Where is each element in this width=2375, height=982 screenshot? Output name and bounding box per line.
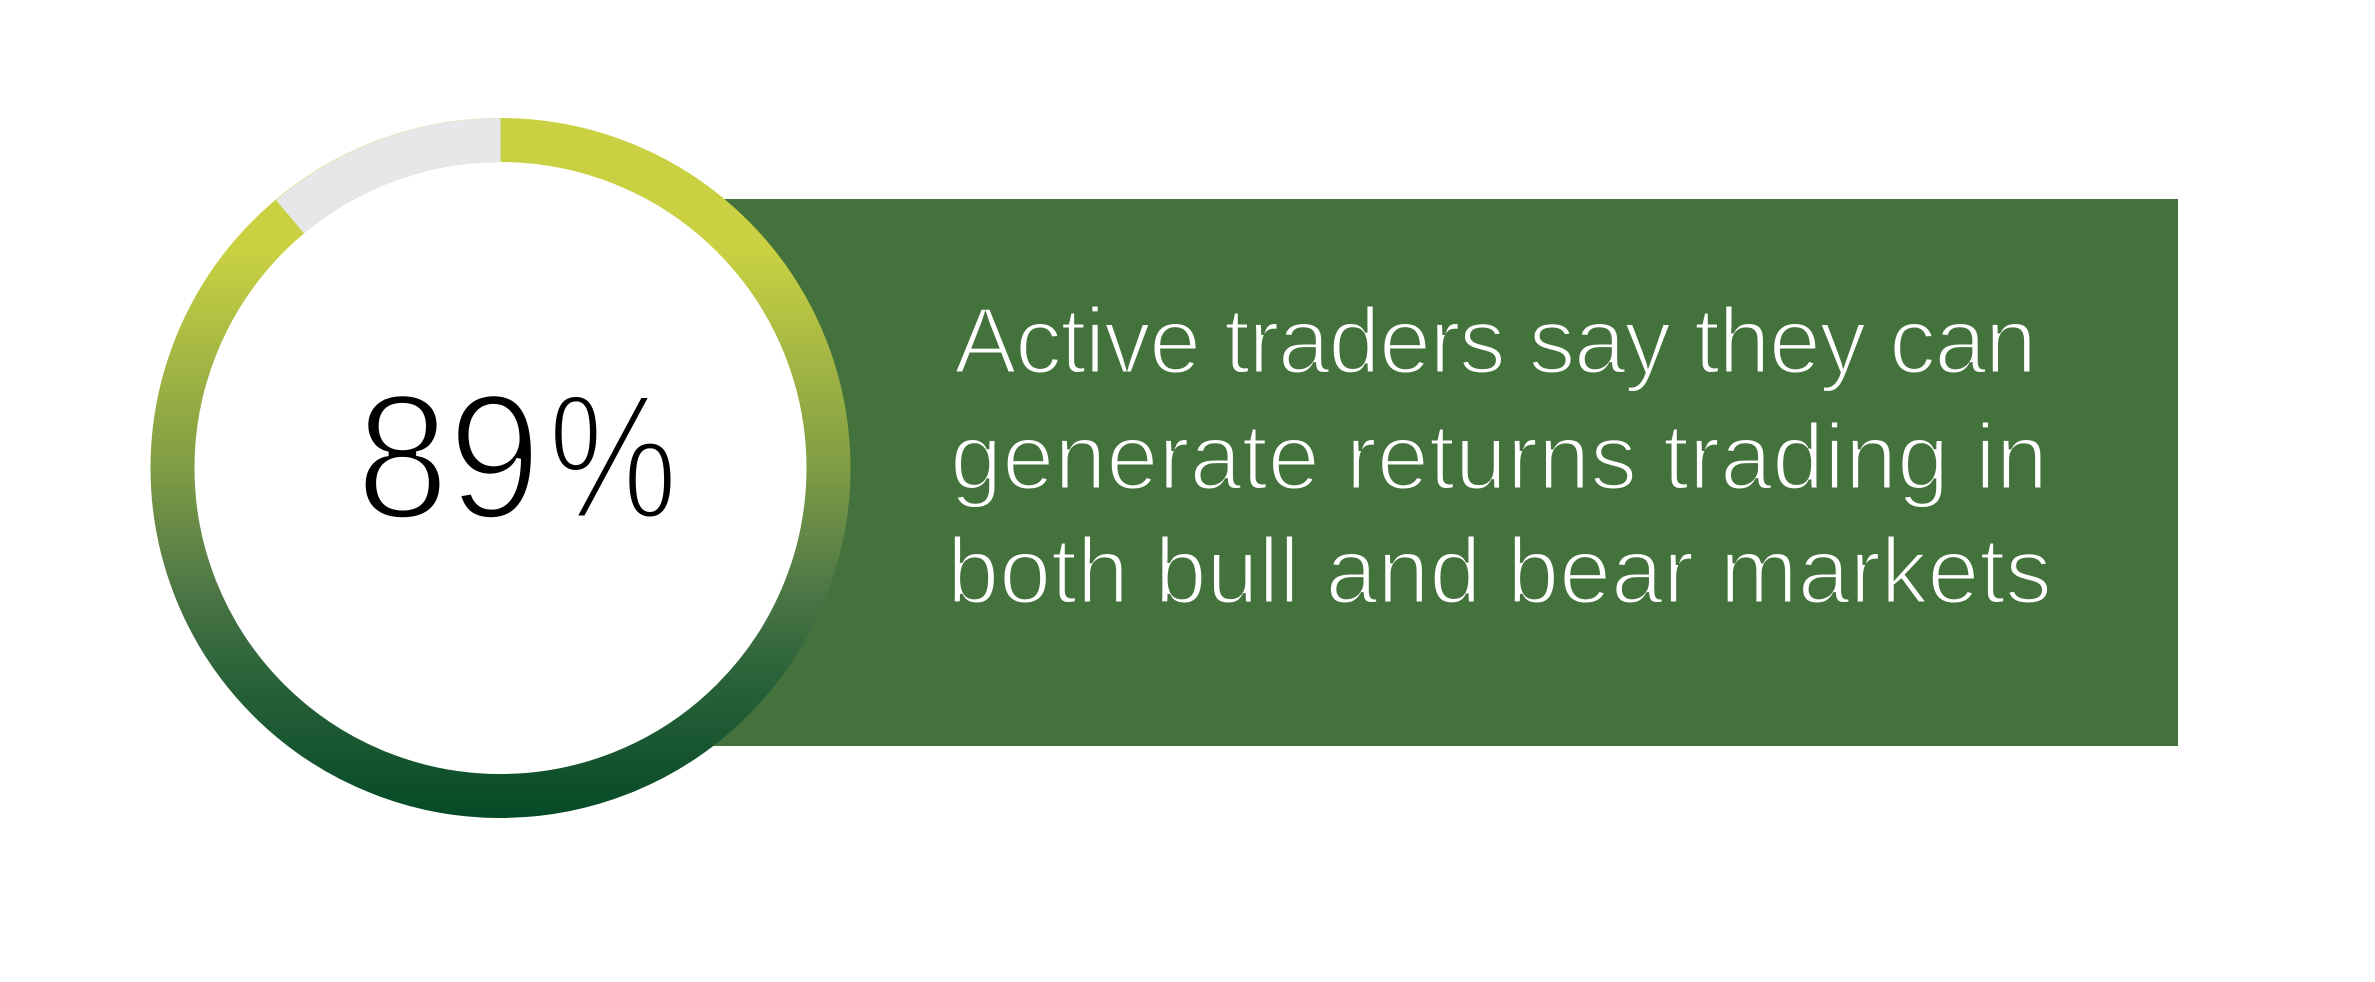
ring: remaining 11% grey segment <box>276 118 500 234</box>
percentage value: 89 <box>356 357 541 556</box>
percentage value <box>356 357 678 556</box>
white centre disc <box>180 148 820 788</box>
statement text: Active traders say they can <box>954 288 2037 393</box>
statement text <box>947 288 2052 623</box>
donut chart: 89% <box>172 118 828 796</box>
percentage value: % <box>548 358 678 556</box>
ring: 89% gradient segment <box>172 140 828 796</box>
statement text: both bull and bear markets <box>947 518 2052 623</box>
panel: green statement box <box>640 199 2178 746</box>
statement text: generate returns trading in <box>950 404 2048 509</box>
